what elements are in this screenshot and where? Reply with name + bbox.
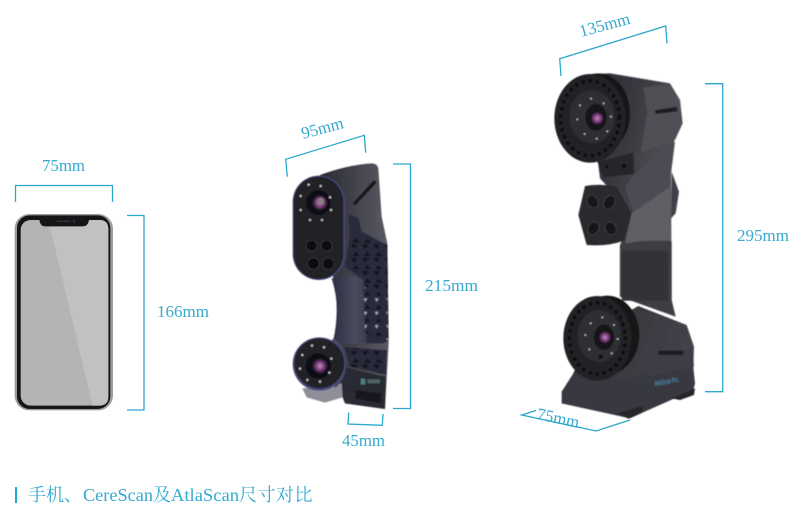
- phone height bracket: [127, 216, 144, 410]
- caption text: 及: [153, 485, 171, 505]
- phone width label: 75mm: [42, 156, 85, 175]
- CereScan height label: 215mm: [425, 276, 478, 295]
- CereScan depth label: 45mm: [342, 431, 385, 450]
- caption text: 机: [46, 485, 64, 505]
- caption text: 手: [28, 485, 46, 505]
- caption text: 、: [64, 485, 82, 505]
- CereScan green logo label: [358, 376, 382, 387]
- AtlaScan model name: AtlaScan Pro: [654, 375, 679, 388]
- AtlaScan width bracket: [560, 26, 667, 76]
- AtlaScan width label: 135mm: [577, 9, 632, 41]
- caption accent bar: [15, 487, 17, 503]
- caption text: CereScan: [83, 485, 153, 505]
- caption text: 比: [294, 485, 312, 505]
- AtlaScan height label: 295mm: [737, 226, 789, 245]
- caption text: 尺: [239, 485, 257, 505]
- caption text: AtlaScan: [171, 485, 239, 505]
- CereScan scanner illustration: [293, 163, 389, 409]
- AtlaScan depth bracket: [522, 410, 630, 431]
- phone group: [15, 156, 209, 410]
- CereScan height bracket: [393, 164, 410, 408]
- caption text: 对: [276, 485, 294, 505]
- CereScan group: [286, 113, 478, 450]
- phone illustration: [15, 214, 113, 410]
- caption: [15, 485, 312, 505]
- phone width bracket: [16, 186, 112, 202]
- phone height label: 166mm: [157, 302, 209, 321]
- AtlaScan scanner illustration: [554, 73, 695, 419]
- CereScan depth bracket: [348, 413, 383, 425]
- CereScan width label: 95mm: [299, 113, 346, 143]
- AtlaScan height bracket: [705, 84, 723, 392]
- CereScan width bracket: [286, 135, 366, 177]
- AtlaScan depth label: 75mm: [535, 404, 581, 432]
- caption text: 寸: [258, 485, 276, 505]
- AtlaScan group: [522, 9, 789, 432]
